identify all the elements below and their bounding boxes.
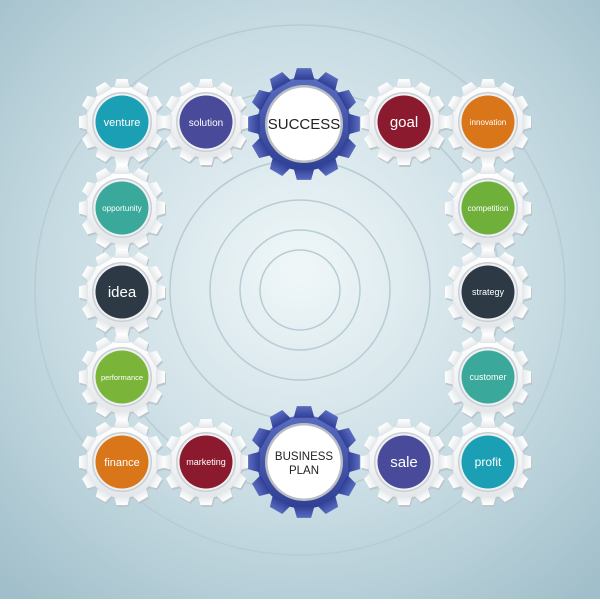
gear: goal: goal xyxy=(390,114,418,131)
gear: idea xyxy=(79,249,166,337)
gear: customer: customer xyxy=(469,372,507,382)
gear: venture xyxy=(79,79,166,167)
gear: innovation xyxy=(445,79,532,167)
gear: marketing xyxy=(163,419,250,507)
gear: solution: solution xyxy=(189,118,223,129)
gear: performance: performance xyxy=(101,373,143,382)
gear: goal xyxy=(361,79,448,167)
gear: innovation: innovation xyxy=(470,118,506,127)
gear: competition: competition xyxy=(468,204,508,213)
gear: opportunity xyxy=(79,165,166,253)
gear: BUSINESS PLAN: BUSINESS xyxy=(275,451,333,463)
gear: finance: finance xyxy=(104,457,140,469)
gear: SUCCESS: SUCCESS xyxy=(268,116,340,133)
gear: venture: venture xyxy=(104,117,140,129)
gear: BUSINESS PLAN xyxy=(248,406,360,518)
gear: strategy xyxy=(445,249,532,337)
gear: finance xyxy=(79,419,166,507)
gear: performance xyxy=(79,334,166,422)
gear: customer xyxy=(445,334,532,422)
gear: sale: sale xyxy=(390,454,418,471)
gear: sale xyxy=(361,419,448,507)
gear: SUCCESS xyxy=(248,68,360,180)
gear: solution xyxy=(163,79,250,167)
gear: opportunity: opportunity xyxy=(102,204,142,213)
gear: strategy: strategy xyxy=(472,287,505,297)
gear: idea: idea xyxy=(108,284,137,301)
gear: competition xyxy=(445,165,532,253)
gear: marketing: marketing xyxy=(186,457,226,467)
gear: profit: profit xyxy=(475,455,502,469)
gear: BUSINESS PLAN: PLAN xyxy=(289,465,319,477)
gear: profit xyxy=(445,419,532,507)
